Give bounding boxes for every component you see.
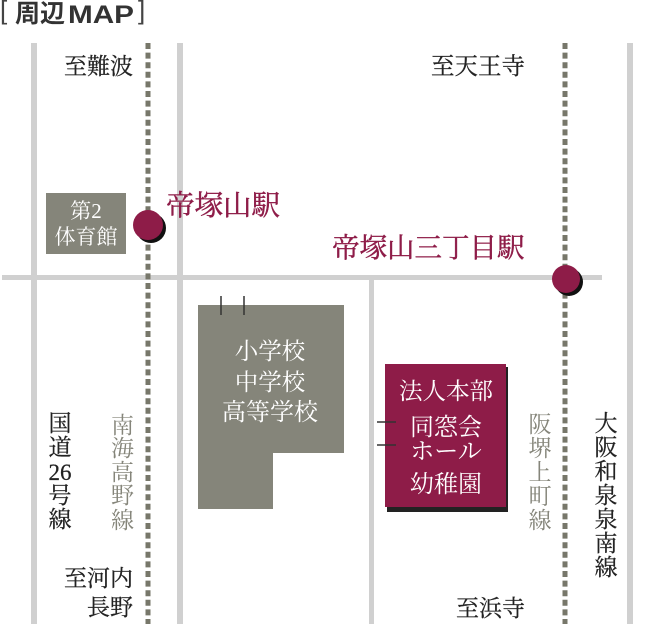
label: route 26	[48, 411, 72, 532]
label: Teizukayama station: 帝塚山駅	[166, 190, 280, 222]
label: Osaka Izumi Senan line: 泉	[594, 483, 618, 508]
label: route 26: 26	[48, 460, 72, 485]
label: to Tennoji: 至天王寺	[431, 53, 525, 80]
station marker: Teizukayama 3-chome	[552, 265, 583, 296]
label: Osaka Izumi Senan line: 大	[594, 411, 618, 436]
label: Nankai Koya line: 海	[111, 436, 134, 461]
panel: headquarters: 幼稚園	[410, 471, 482, 498]
panel: second gymnasium	[46, 193, 126, 254]
panel: headquarters: ホール	[410, 439, 482, 465]
panel: schools	[198, 296, 344, 509]
label: Osaka Izumi Senan line	[594, 411, 618, 580]
panel: headquarters: 法人本部	[399, 378, 493, 405]
label: to Kawachinagano: 長野	[87, 595, 133, 620]
label: Nankai Koya line: 南	[111, 413, 134, 438]
panel: second gymnasium: 体育館	[54, 225, 118, 249]
label: Hankai Uemachi line	[528, 412, 552, 533]
railway: Hankai Uemachi line	[562, 43, 568, 624]
label: to Namba: 至難波	[64, 54, 133, 79]
label: route 26: 道	[48, 435, 72, 460]
label: route 26: 線	[48, 507, 72, 532]
label: Teizukayama 3-chome station: 帝塚山三丁目駅	[332, 232, 524, 263]
label: route 26: 国	[48, 411, 72, 436]
label: to Kawachinagano	[64, 566, 133, 620]
panel: second gymnasium: 第2	[70, 199, 102, 223]
panel: schools: 高等学校	[222, 399, 319, 426]
title: MAP	[68, 1, 134, 29]
panel: schools: 中学校	[235, 369, 306, 396]
panel: headquarters	[377, 364, 508, 512]
label: Hankai Uemachi line: 阪	[528, 412, 552, 437]
label: route 26: 号	[48, 483, 72, 508]
panel: schools: 小学校	[235, 338, 306, 365]
label: Nankai Koya line: 野	[111, 483, 134, 508]
label: Osaka Izumi Senan line: 線	[594, 555, 618, 580]
label: Nankai Koya line: 線	[111, 508, 134, 533]
label: Nankai Koya line	[111, 413, 134, 533]
road: right vertical	[627, 43, 633, 624]
label: Hankai Uemachi line: 町	[528, 484, 552, 509]
label: Osaka Izumi Senan line: 南	[594, 531, 618, 556]
title: 周辺	[15, 0, 65, 28]
road: lower vertical	[369, 278, 374, 624]
label: Osaka Izumi Senan line: 泉	[594, 507, 618, 532]
label: Hankai Uemachi line: 堺	[528, 436, 552, 461]
label: to Hamadera: 至浜寺	[456, 596, 525, 621]
label: Osaka Izumi Senan line: 阪	[594, 435, 618, 460]
label: Hankai Uemachi line: 線	[528, 508, 552, 533]
road: horizontal	[2, 275, 602, 280]
label: Osaka Izumi Senan line: 和	[594, 459, 618, 484]
road: central vertical	[177, 43, 183, 624]
railway: Nankai Koya line	[146, 43, 150, 624]
label: to Kawachinagano: 至河内	[64, 566, 133, 591]
road: national route 26	[31, 43, 37, 624]
panel: headquarters: 同窓会	[410, 414, 482, 441]
station marker: Teizukayama	[133, 210, 166, 243]
title	[0, 0, 145, 29]
label: Nankai Koya line: 高	[111, 460, 134, 485]
label: Hankai Uemachi line: 上	[528, 460, 552, 485]
